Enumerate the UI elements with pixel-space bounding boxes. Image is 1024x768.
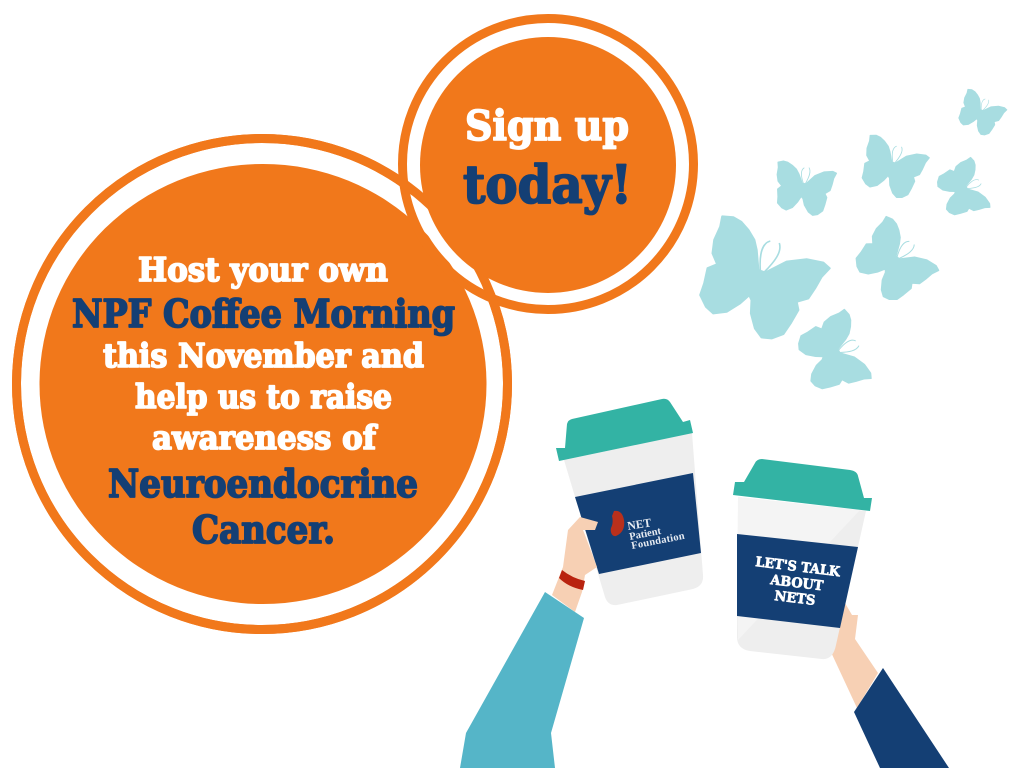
- text block: host your own coffee morning: Neuroendocrine: [108, 461, 418, 506]
- navy sleeve: [854, 668, 949, 768]
- heading: sign up today: today!: [463, 155, 632, 216]
- butterfly: lower: [783, 300, 893, 410]
- cup body: [564, 433, 703, 605]
- heading: sign up today: Sign up: [465, 102, 629, 150]
- butterflies: [700, 89, 1008, 410]
- butterfly: upper left: [767, 148, 846, 224]
- cup highlight: [738, 497, 860, 640]
- cup label: let's talk about NETs: ABOUT: [769, 572, 824, 594]
- heading: sign up today: [463, 102, 632, 216]
- hand: [552, 517, 598, 612]
- butterfly: large: [700, 216, 830, 338]
- coffee cup: right: [733, 459, 872, 659]
- text block: host your own coffee morning: help us to raise: [135, 377, 392, 416]
- butterfly: right: [926, 151, 1006, 230]
- butterfly: middle: [847, 212, 950, 312]
- cup body: [737, 497, 866, 659]
- large orange circle: [16, 138, 508, 630]
- butterfly: upper middle: [859, 130, 933, 201]
- cup band: [737, 534, 858, 628]
- text block: host your own coffee morning: Cancer.: [192, 507, 335, 552]
- small orange circle: [16, 18, 694, 630]
- blue sleeve: [460, 592, 584, 768]
- logo: NET Patient Foundation: Patient: [628, 526, 662, 543]
- cup lid: [556, 399, 693, 461]
- cup label: let's talk about NETs: NETS: [774, 588, 816, 609]
- text block: host your own coffee morning: Host your own: [138, 250, 388, 289]
- arm: right: [830, 603, 949, 768]
- logo: NET Patient Foundation: [611, 511, 686, 552]
- cup label: let's talk about NETs: [755, 554, 842, 609]
- cup lid: [733, 459, 872, 511]
- hand: [830, 603, 878, 708]
- text block: host your own coffee morning: [72, 250, 455, 552]
- red wristband: [559, 570, 585, 590]
- cup sleeve band: [575, 473, 701, 574]
- butterfly: top right: [958, 89, 1008, 136]
- arm: left: [460, 517, 598, 768]
- text block: host your own coffee morning: awareness of: [152, 418, 378, 457]
- logo: NET Patient Foundation: NET: [626, 515, 652, 533]
- text block: host your own coffee morning: NPF Coffee Morning: [72, 291, 455, 336]
- text block: host your own coffee morning: this November and: [103, 336, 424, 375]
- logo: NET Patient Foundation: Foundation: [630, 531, 686, 552]
- coffee cup: left: [556, 399, 703, 605]
- cup label: let's talk about NETs: LET'S TALK: [755, 554, 842, 580]
